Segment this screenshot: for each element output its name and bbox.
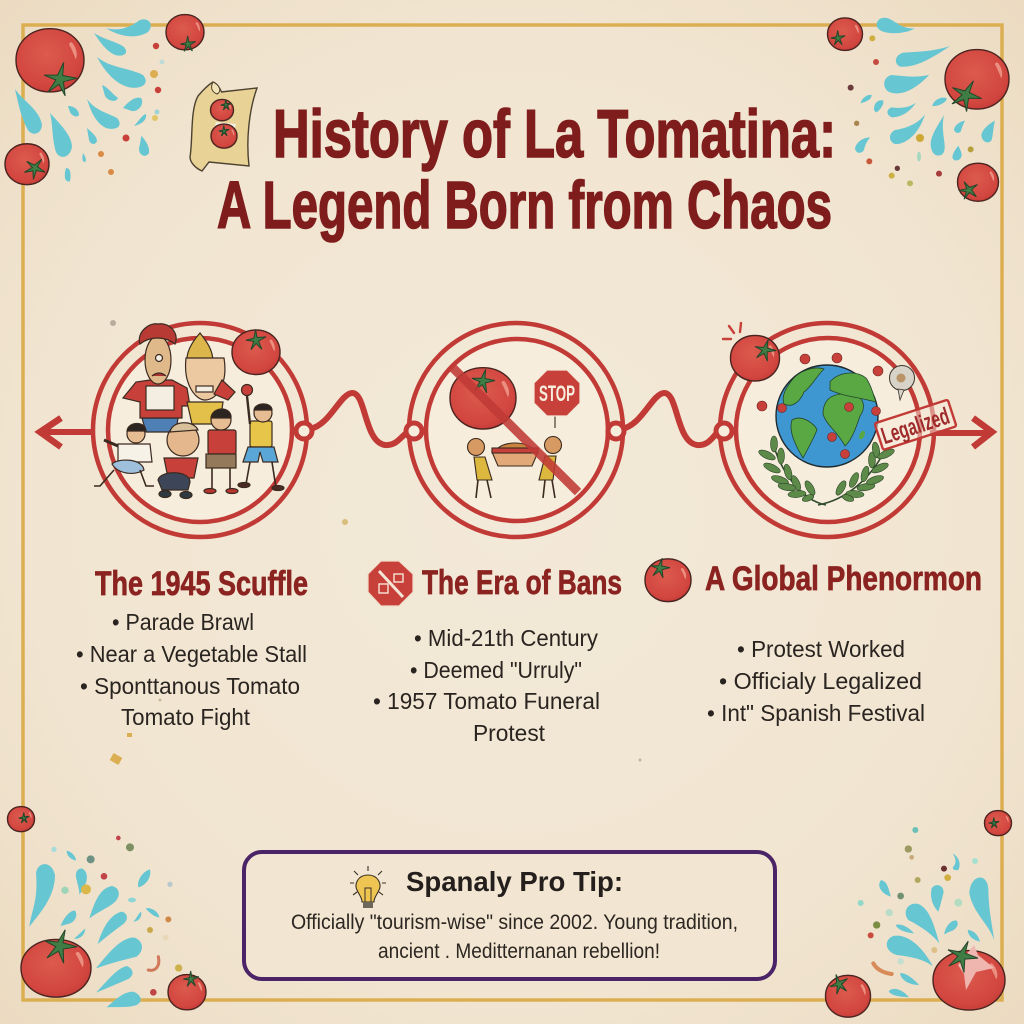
text block: the 1945 scuffle: The 1945 Scuffle [95,565,308,603]
scattered confetti [110,320,642,765]
speech bubble [890,366,914,400]
children carrying tomato tray [468,436,562,498]
panel: era of bans illustration [409,323,623,537]
figure: boy in yellow shirt with tomato [238,384,284,490]
text block: the era of bans: • Mid-21th Century [414,625,598,651]
text block: the 1945 scuffle: • Near a Vegetable Stall [76,641,307,667]
title: History of La Tomatina: [273,96,836,172]
icon: banned octagon [368,561,413,606]
panel: global phenomenon illustration [720,323,957,537]
figure: boy in white shirt [94,424,154,486]
timeline nodes [296,423,732,439]
figure: man with yellow hat [186,333,235,424]
text block: the 1945 scuffle: • Sponttanous Tomato [80,673,300,699]
figure: large man with red hat [123,324,190,432]
figure: crouching man in red [158,423,199,498]
icon: light bulb [350,866,386,908]
text block: the era of bans: • Deemed "Urruly" [410,657,582,683]
corner decoration: top right [828,18,1009,203]
globe [776,365,878,467]
double ring three [720,323,934,537]
figure: boy in red shirt [204,409,238,494]
timeline with wavy connectors and arrows [40,393,992,447]
text block: the era of bans: The Era of Bans [422,564,622,602]
panel: 1945 scuffle illustration [93,323,307,537]
double ring one [93,323,307,537]
text block: the 1945 scuffle [76,565,308,730]
text block: a global phenomenon: • Protest Worked [737,636,905,662]
text block: the era of bans: • 1957 Tomato Funeral [373,688,600,714]
text block: the era of bans: Protest [473,720,546,746]
prohibition slash [451,366,578,492]
callout: pro tip: Officially "tourism-wise" since 2002. Young tradition, [291,910,738,934]
small tomatoes around globe [757,353,883,458]
corner decoration: bottom right [826,811,1012,1017]
callout: pro tip: ancient . Meditternanan rebellion! [378,939,660,963]
callout: pro tip [244,852,775,979]
text block: the 1945 scuffle: • Parade Brawl [112,609,254,635]
icon: stop sign [534,370,580,428]
title [217,96,836,243]
double ring two [409,323,623,537]
icon: scroll with tomatoes [190,82,257,171]
legalized stamp [875,400,957,451]
tomato on ring three with burst marks [723,323,780,381]
icon: tomato [645,556,691,602]
callout: pro tip: Spanaly Pro Tip: [406,866,623,897]
text block: a global phenomenon [645,556,982,726]
text block: the era of bans [368,561,622,746]
corner decoration: bottom left [8,807,206,1010]
text block: a global phenomenon: • Officialy Legalized [719,668,922,694]
text block: a global phenomenon: • Int" Spanish Festival [707,700,925,726]
icon: stop sign: STOP [539,381,575,406]
banned tomato [450,366,516,429]
legalized stamp: Legalized [878,403,953,450]
text block: the 1945 scuffle: Tomato Fight [121,704,251,730]
laurel wreath [757,436,896,505]
tomato on ring one [232,330,280,375]
corner decoration: top left [5,15,204,185]
